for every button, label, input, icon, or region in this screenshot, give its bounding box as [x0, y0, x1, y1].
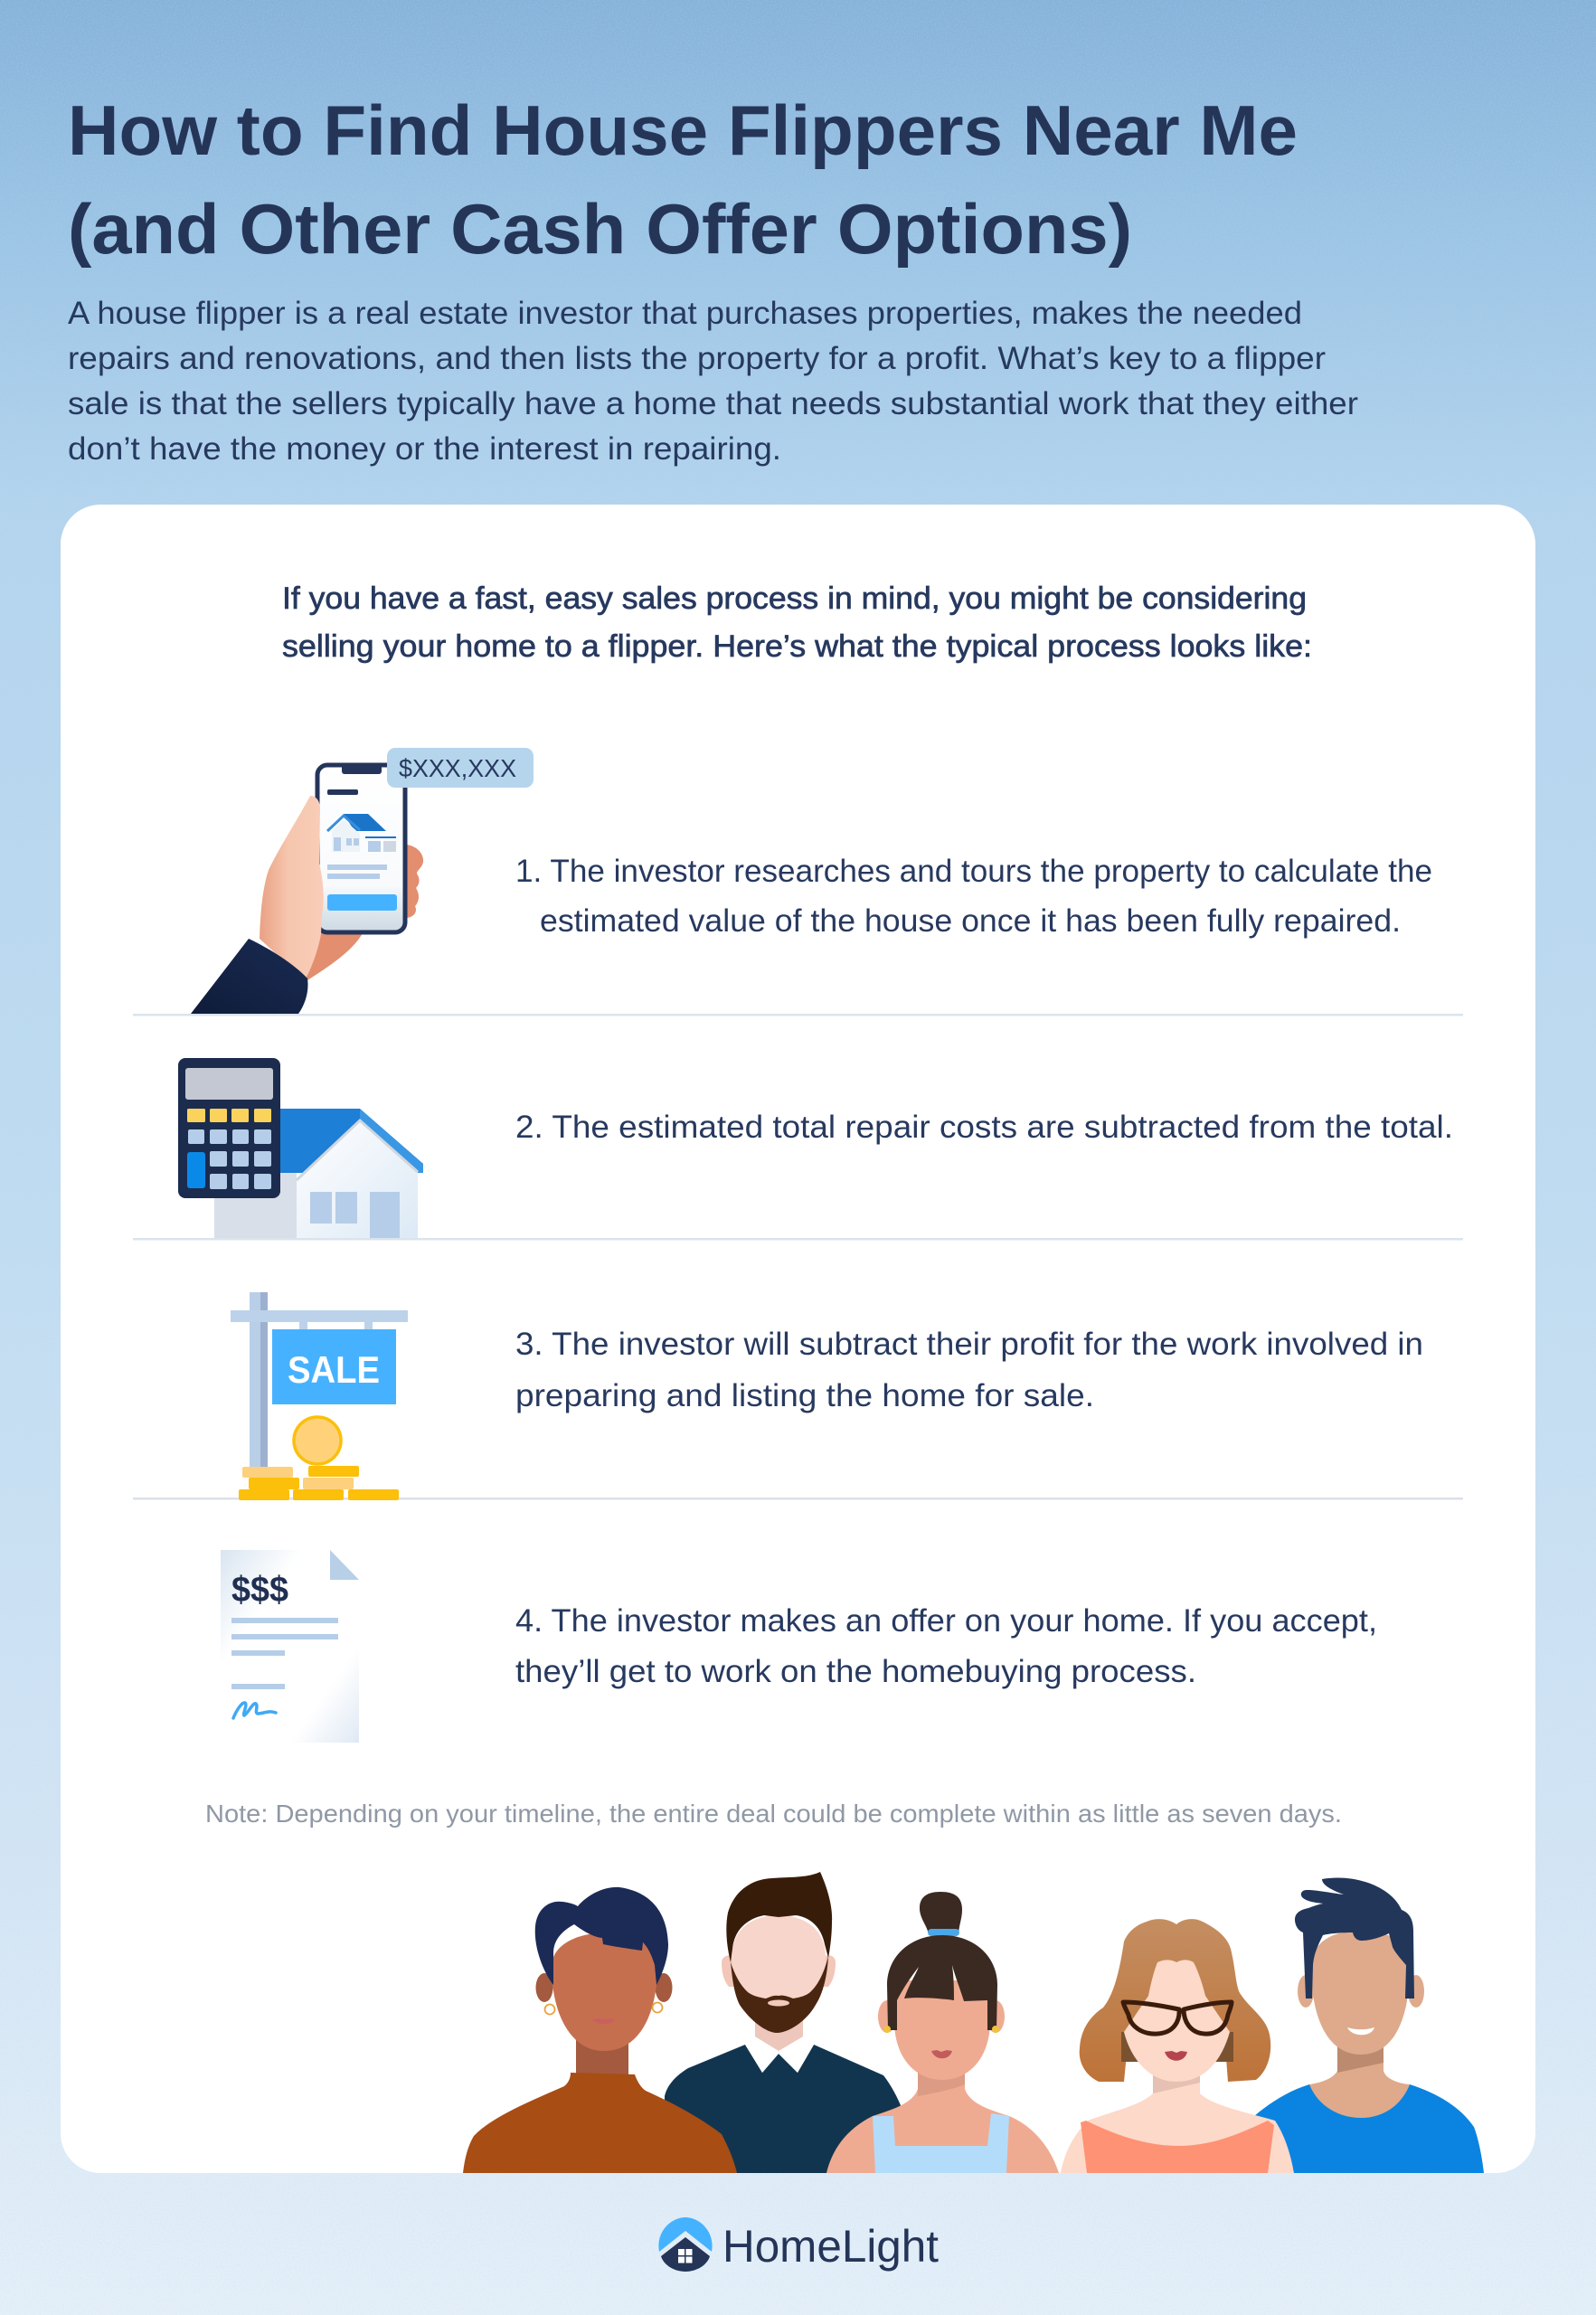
icon: hand holding phone — [191, 748, 534, 1014]
person: bearded man — [665, 1872, 902, 2173]
icon: offer document: $$$ — [231, 1570, 288, 1610]
person: man in blue shirt — [1254, 1878, 1484, 2173]
step 4 text: 4. The investor makes an offer on your home. If you accept, — [515, 1603, 1377, 1639]
intro paragraph: don’t have the money or the interest in repairing. — [68, 431, 781, 467]
icon: sale sign with coins — [231, 1292, 408, 1489]
step 3 text: preparing and listing the home for sale. — [515, 1378, 1094, 1413]
intro paragraph: sale is that the sellers typically have a home that needs substantial work that they either — [68, 386, 1358, 421]
title — [68, 90, 1298, 269]
person: woman with short dark hair — [463, 1887, 737, 2173]
person: woman with bun — [826, 1892, 1059, 2173]
step 1 text: 1. The investor researches and tours the property to calculate the — [515, 854, 1432, 889]
logo: HomeLight: HomeLight — [722, 2221, 939, 2272]
illustration: group of people — [463, 1872, 1484, 2173]
price tag: $XXX,XXX — [399, 754, 516, 782]
title: How to Find House Flippers Near Me — [68, 90, 1298, 170]
step 2 text: 2. The estimated total repair costs are subtracted from the total. — [515, 1110, 1453, 1145]
intro paragraph — [68, 296, 1358, 467]
title: (and Other Cash Offer Options) — [68, 189, 1132, 269]
lead-in text — [282, 581, 1312, 664]
step 1 text — [515, 854, 1432, 939]
step 4 text: they’ll get to work on the homebuying process. — [515, 1654, 1196, 1689]
icon: calculator and house — [178, 1058, 423, 1239]
price tag — [387, 748, 534, 788]
lead-in text: If you have a fast, easy sales process in mind, you might be considering — [282, 581, 1307, 616]
step 3 text — [515, 1327, 1423, 1413]
note: Note: Depending on your timeline, the entire deal could be complete within as little as seven days. — [205, 1800, 1342, 1828]
intro paragraph: A house flipper is a real estate investor that purchases properties, makes the needed — [68, 296, 1302, 331]
icon: logo mark — [658, 2217, 713, 2272]
step 4 text — [515, 1603, 1377, 1689]
coins base row — [239, 1489, 399, 1500]
panel: process card — [61, 505, 1535, 2173]
icon: sale sign with coins: SALE — [288, 1348, 380, 1391]
icon: offer document — [221, 1550, 359, 1743]
lead-in text: selling your home to a flipper. Here’s what the typical process looks like: — [282, 629, 1312, 664]
person: woman with glasses — [1061, 1919, 1294, 2173]
step 3 text: 3. The investor will subtract their profit for the work involved in — [515, 1327, 1423, 1362]
intro paragraph: repairs and renovations, and then lists the property for a profit. What’s key to a flipper — [68, 341, 1326, 376]
step 1 text: estimated value of the house once it has been fully repaired. — [540, 903, 1401, 939]
